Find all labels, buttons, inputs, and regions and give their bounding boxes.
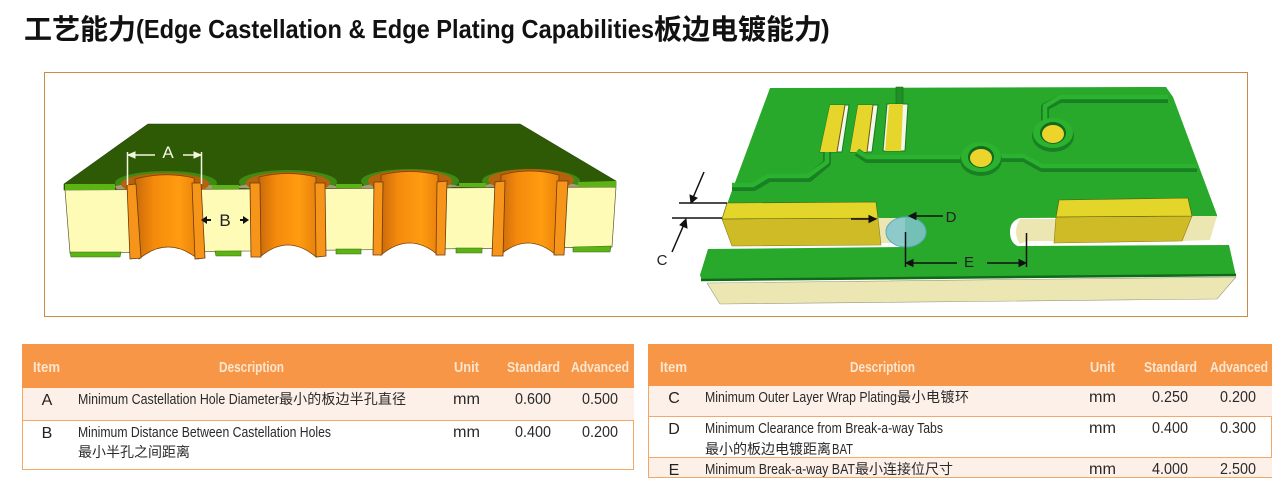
dimension D	[851, 209, 957, 226]
table header: Item	[660, 360, 687, 376]
row D: 最小的板边电镀距离	[705, 441, 831, 457]
table header: Description	[850, 360, 915, 376]
table: plating capabilities	[648, 344, 1272, 479]
row A	[22, 388, 634, 420]
row A: A	[42, 392, 53, 409]
hole 3	[368, 170, 452, 256]
dimension C	[657, 172, 727, 269]
title: 板边电镀能力	[654, 14, 822, 45]
diagram: edge castellation board	[64, 124, 616, 260]
via 2	[1032, 118, 1074, 152]
dimension B: B	[219, 211, 231, 230]
row C: C	[668, 390, 680, 407]
row E: mm	[1089, 461, 1116, 478]
row E	[648, 458, 1272, 479]
table header	[22, 344, 634, 388]
title: )	[821, 14, 830, 44]
dimension A	[128, 143, 202, 185]
table header: Unit	[1090, 360, 1115, 376]
row B: 0.400	[515, 424, 551, 441]
row B: B	[42, 425, 52, 442]
table header: Unit	[454, 360, 479, 376]
table header: Advanced	[571, 360, 629, 376]
row D: mm	[1089, 420, 1116, 437]
table header	[648, 344, 1272, 386]
left plated edge	[722, 202, 905, 246]
dimension E: E	[964, 254, 974, 271]
title	[24, 14, 830, 45]
dimension C: C	[657, 252, 668, 269]
via 1	[960, 142, 1002, 176]
row C: mm	[1089, 389, 1116, 406]
row D: D	[668, 421, 680, 438]
row A: Minimum Castellation Hole Diameter	[78, 392, 279, 408]
table header: Item	[33, 360, 60, 376]
title: 工艺能力	[24, 14, 136, 45]
dimension A: A	[162, 143, 174, 162]
row A: 0.600	[515, 391, 551, 408]
row B: mm	[453, 424, 480, 441]
row D: BAT	[832, 442, 853, 458]
row E: 2.500	[1220, 461, 1256, 478]
row D: Minimum Clearance from Break-a-way Tabs	[705, 421, 943, 437]
row B: 最小半孔之间距离	[78, 444, 190, 460]
table header: Advanced	[1210, 360, 1268, 376]
row E: 最小连接位尺寸	[855, 461, 953, 477]
diagram: edge plating board	[657, 87, 1236, 304]
row B: Minimum Distance Between Castellation Holes	[78, 425, 331, 441]
bottom rail	[700, 245, 1236, 304]
traces	[732, 97, 1197, 187]
row E: E	[669, 462, 679, 479]
row B: 0.200	[582, 424, 618, 441]
dimension E	[906, 232, 1026, 271]
row B	[42, 424, 618, 460]
main board top	[722, 87, 1217, 262]
row D	[668, 420, 1256, 458]
row E: 4.000	[1152, 461, 1188, 478]
contact pads	[820, 104, 908, 152]
hole 1	[121, 173, 209, 260]
row D: 0.400	[1152, 420, 1188, 437]
title: (Edge Castellation & Edge Plating Capabilities	[136, 14, 654, 44]
hole 4	[488, 169, 574, 256]
row E: Minimum Break-a-way BAT	[705, 462, 855, 478]
hole 2	[246, 172, 330, 258]
right plated edge	[1016, 198, 1217, 244]
row C: 0.200	[1220, 389, 1256, 406]
table header: Standard	[507, 360, 560, 376]
row A: mm	[453, 391, 480, 408]
panel: diagrams frame	[44, 72, 1248, 316]
row C: 0.250	[1152, 389, 1188, 406]
row A: 0.500	[582, 391, 618, 408]
row C: Minimum Outer Layer Wrap Plating	[705, 390, 897, 406]
table header: Standard	[1144, 360, 1197, 376]
row D: 0.300	[1220, 420, 1256, 437]
row C	[648, 386, 1272, 416]
dimension B	[201, 211, 249, 230]
dimension D: D	[946, 209, 957, 226]
highlight circle	[886, 217, 926, 247]
table header: Description	[219, 360, 284, 376]
table: castellation capabilities	[22, 344, 634, 470]
row A: 最小的板边半孔直径	[279, 391, 406, 407]
row C: 最小电镀环	[897, 389, 969, 405]
